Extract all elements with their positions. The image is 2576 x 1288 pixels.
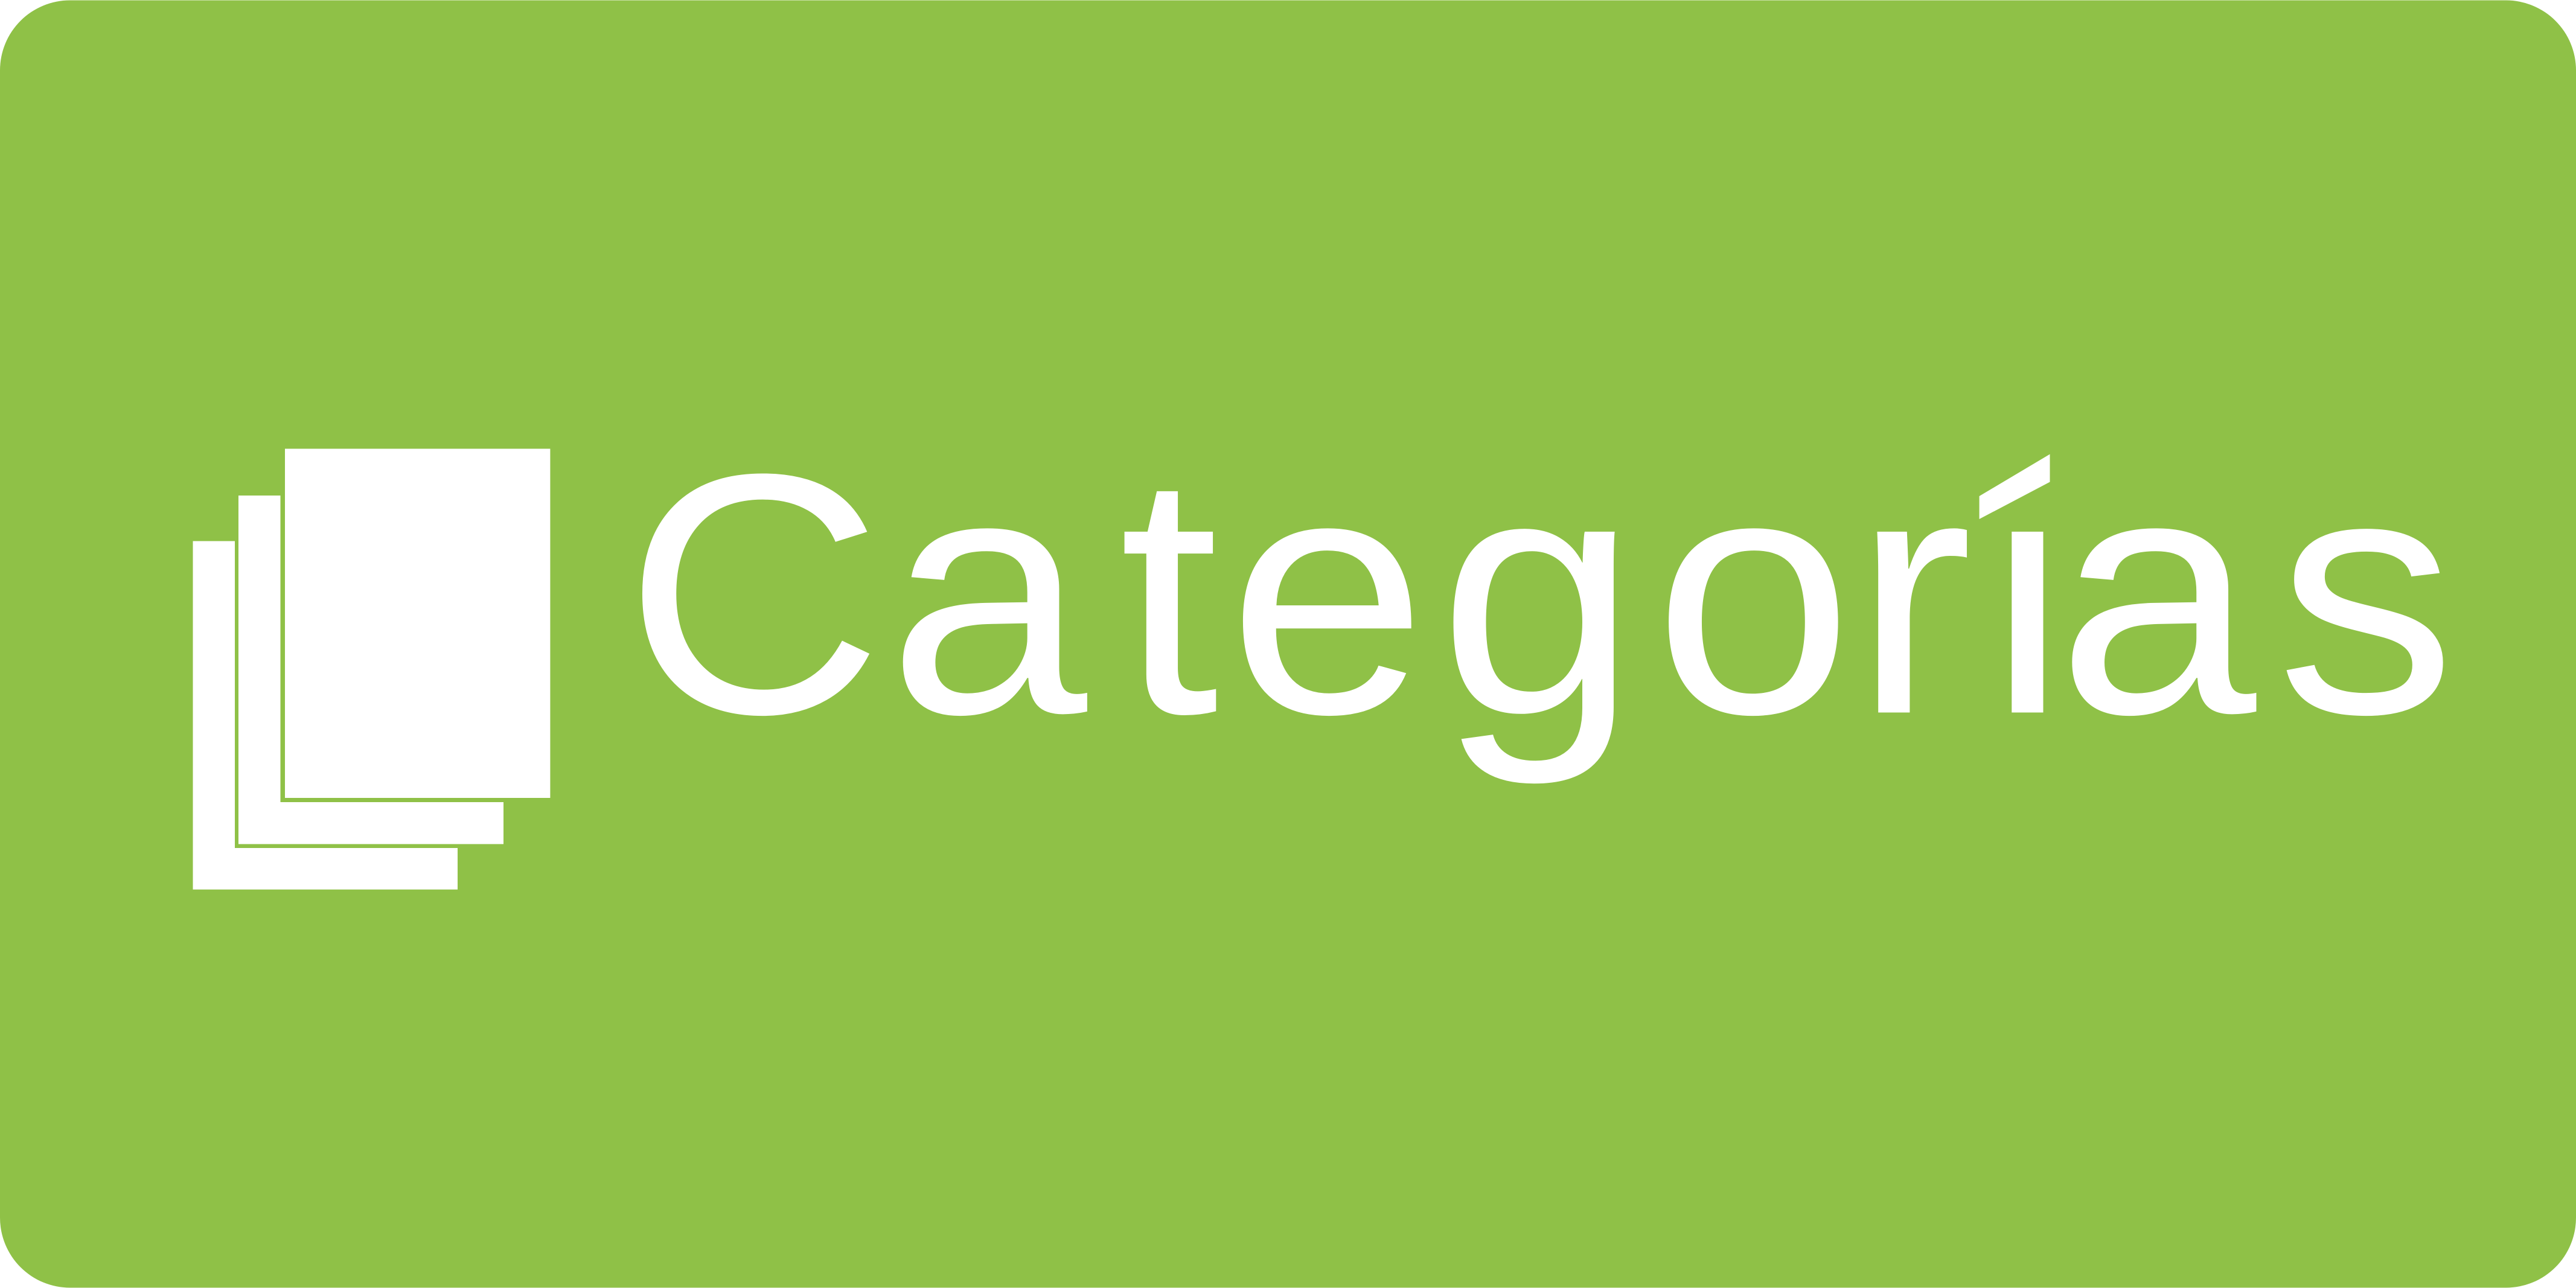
- page: back sheet: [193, 541, 458, 890]
- page: middle sheet: [238, 496, 503, 844]
- page: front sheet: [285, 449, 550, 798]
- heading: Categorías: [642, 454, 2443, 783]
- accent mark on í: [1980, 454, 2050, 519]
- icon: stacked pages: [193, 449, 550, 890]
- heading text: Categorías: [624, 403, 2456, 788]
